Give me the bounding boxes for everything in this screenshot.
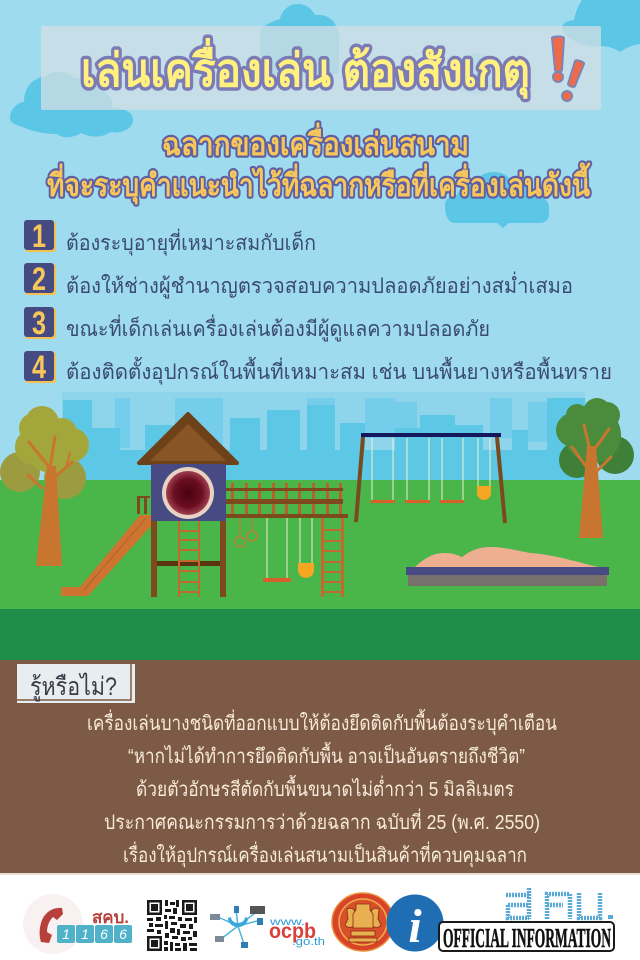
grass [0,480,640,609]
logo: hotline 1166: 1 [62,926,70,942]
house roof [139,414,237,463]
right tree [556,398,634,538]
did you know text: ประกาศคณะกรรมการว่าด้วยฉลาก ฉบับที่ 25 (พ.ศ. 2550) [104,808,540,834]
skyline [62,392,585,480]
tube window [162,467,214,519]
number badge 2: 2 [32,261,46,297]
item 4 text: ต้องติดตั้งอุปกรณ์ในพื้นที่เหมาะสม เช่น บนพื้นยางหรือพื้นทราย [66,357,612,385]
number badge 3 [24,305,56,341]
swing set [356,433,505,523]
gym rings [235,518,257,547]
logo: hotline 1166: สคบ. [92,908,129,927]
badge: did you know [17,664,135,703]
QR code [147,900,197,951]
number badge 4 [24,349,56,385]
panel: did you know [0,660,640,875]
did you know text [87,709,557,868]
footer [0,875,640,960]
centre ladder [178,521,200,597]
did you know text: ด้วยตัวอักษรสีตัดกับพื้นขนาดไม่ต่ำกว่า 5 มิลลิเมตร [136,775,514,801]
number badge 4: 4 [32,349,46,385]
posts and beam [151,521,226,597]
logo: ocpb website: .go.th [292,936,325,948]
play structure [61,414,348,597]
dark green strip [0,609,640,660]
logo: hotline 1166 [23,894,132,954]
number badge 3: 3 [32,305,46,341]
logo: hotline 1166: 1 [81,926,89,942]
sandbox [406,547,609,586]
clouds [10,0,640,228]
logo: official information [439,888,614,953]
icon: information [386,894,444,953]
number badge 2 [24,261,56,297]
item 2 text: ต้องให้ช่างผู้ชำนาญตรวจสอบความปลอดภัยอย่างสม่ำเสมอ [66,271,573,299]
title panel [41,26,601,110]
right ladder [321,518,344,597]
left tree [0,406,89,566]
number badge 1: 1 [32,218,46,254]
did you know text: เครื่องเล่นบางชนิดที่ออกแบบให้ต้องยึดติดกับพื้นต้องระบุคำเตือน [87,709,557,736]
item 1 text: ต้องระบุอายุที่เหมาะสมกับเด็ก [66,228,316,256]
house body [151,464,226,521]
panel: sky background [0,0,640,482]
logo: ocpb website: ocpb [269,920,316,943]
badge: did you know: รู้หรือไม่? [30,672,117,702]
number badge 1 [24,218,56,254]
icon: exclamation marks [552,36,584,101]
title: เล่นเครื่องเล่น ต้องสังเกตุ [81,38,530,99]
logo: hotline 1166: 6 [119,926,127,942]
title: เล่นเครื่องเล่น ต้องสังเกตุ [81,38,530,99]
item 3 text: ขณะที่เด็กเล่นเครื่องเล่นต้องมีผู้ดูแลความปลอดภัย [66,314,490,342]
logo: ocpb website [210,906,325,948]
numbered list [24,218,612,385]
subheading: ฉลากของเครื่องเล่นสนาม [162,122,469,162]
logo: ocpb website: www. [269,917,305,928]
slide [61,496,152,596]
did you know text: “หากไม่ได้ทำการยึดติดกับพื้น อาจเป็นอันตรายถึงชีวิต” [128,742,525,768]
icon: information: i [408,900,422,953]
subheading [47,122,591,205]
hanging swings [263,518,314,582]
logo: hotline 1166: 6 [100,926,108,942]
logo: government seal [332,893,394,951]
railing [226,483,348,518]
subheading: ฉลากของเครื่องเล่นสนาม [162,122,469,162]
did you know text: เรื่องให้อุปกรณ์เครื่องเล่นสนามเป็นสินค้าที่ควบคุมฉลาก [123,841,527,868]
